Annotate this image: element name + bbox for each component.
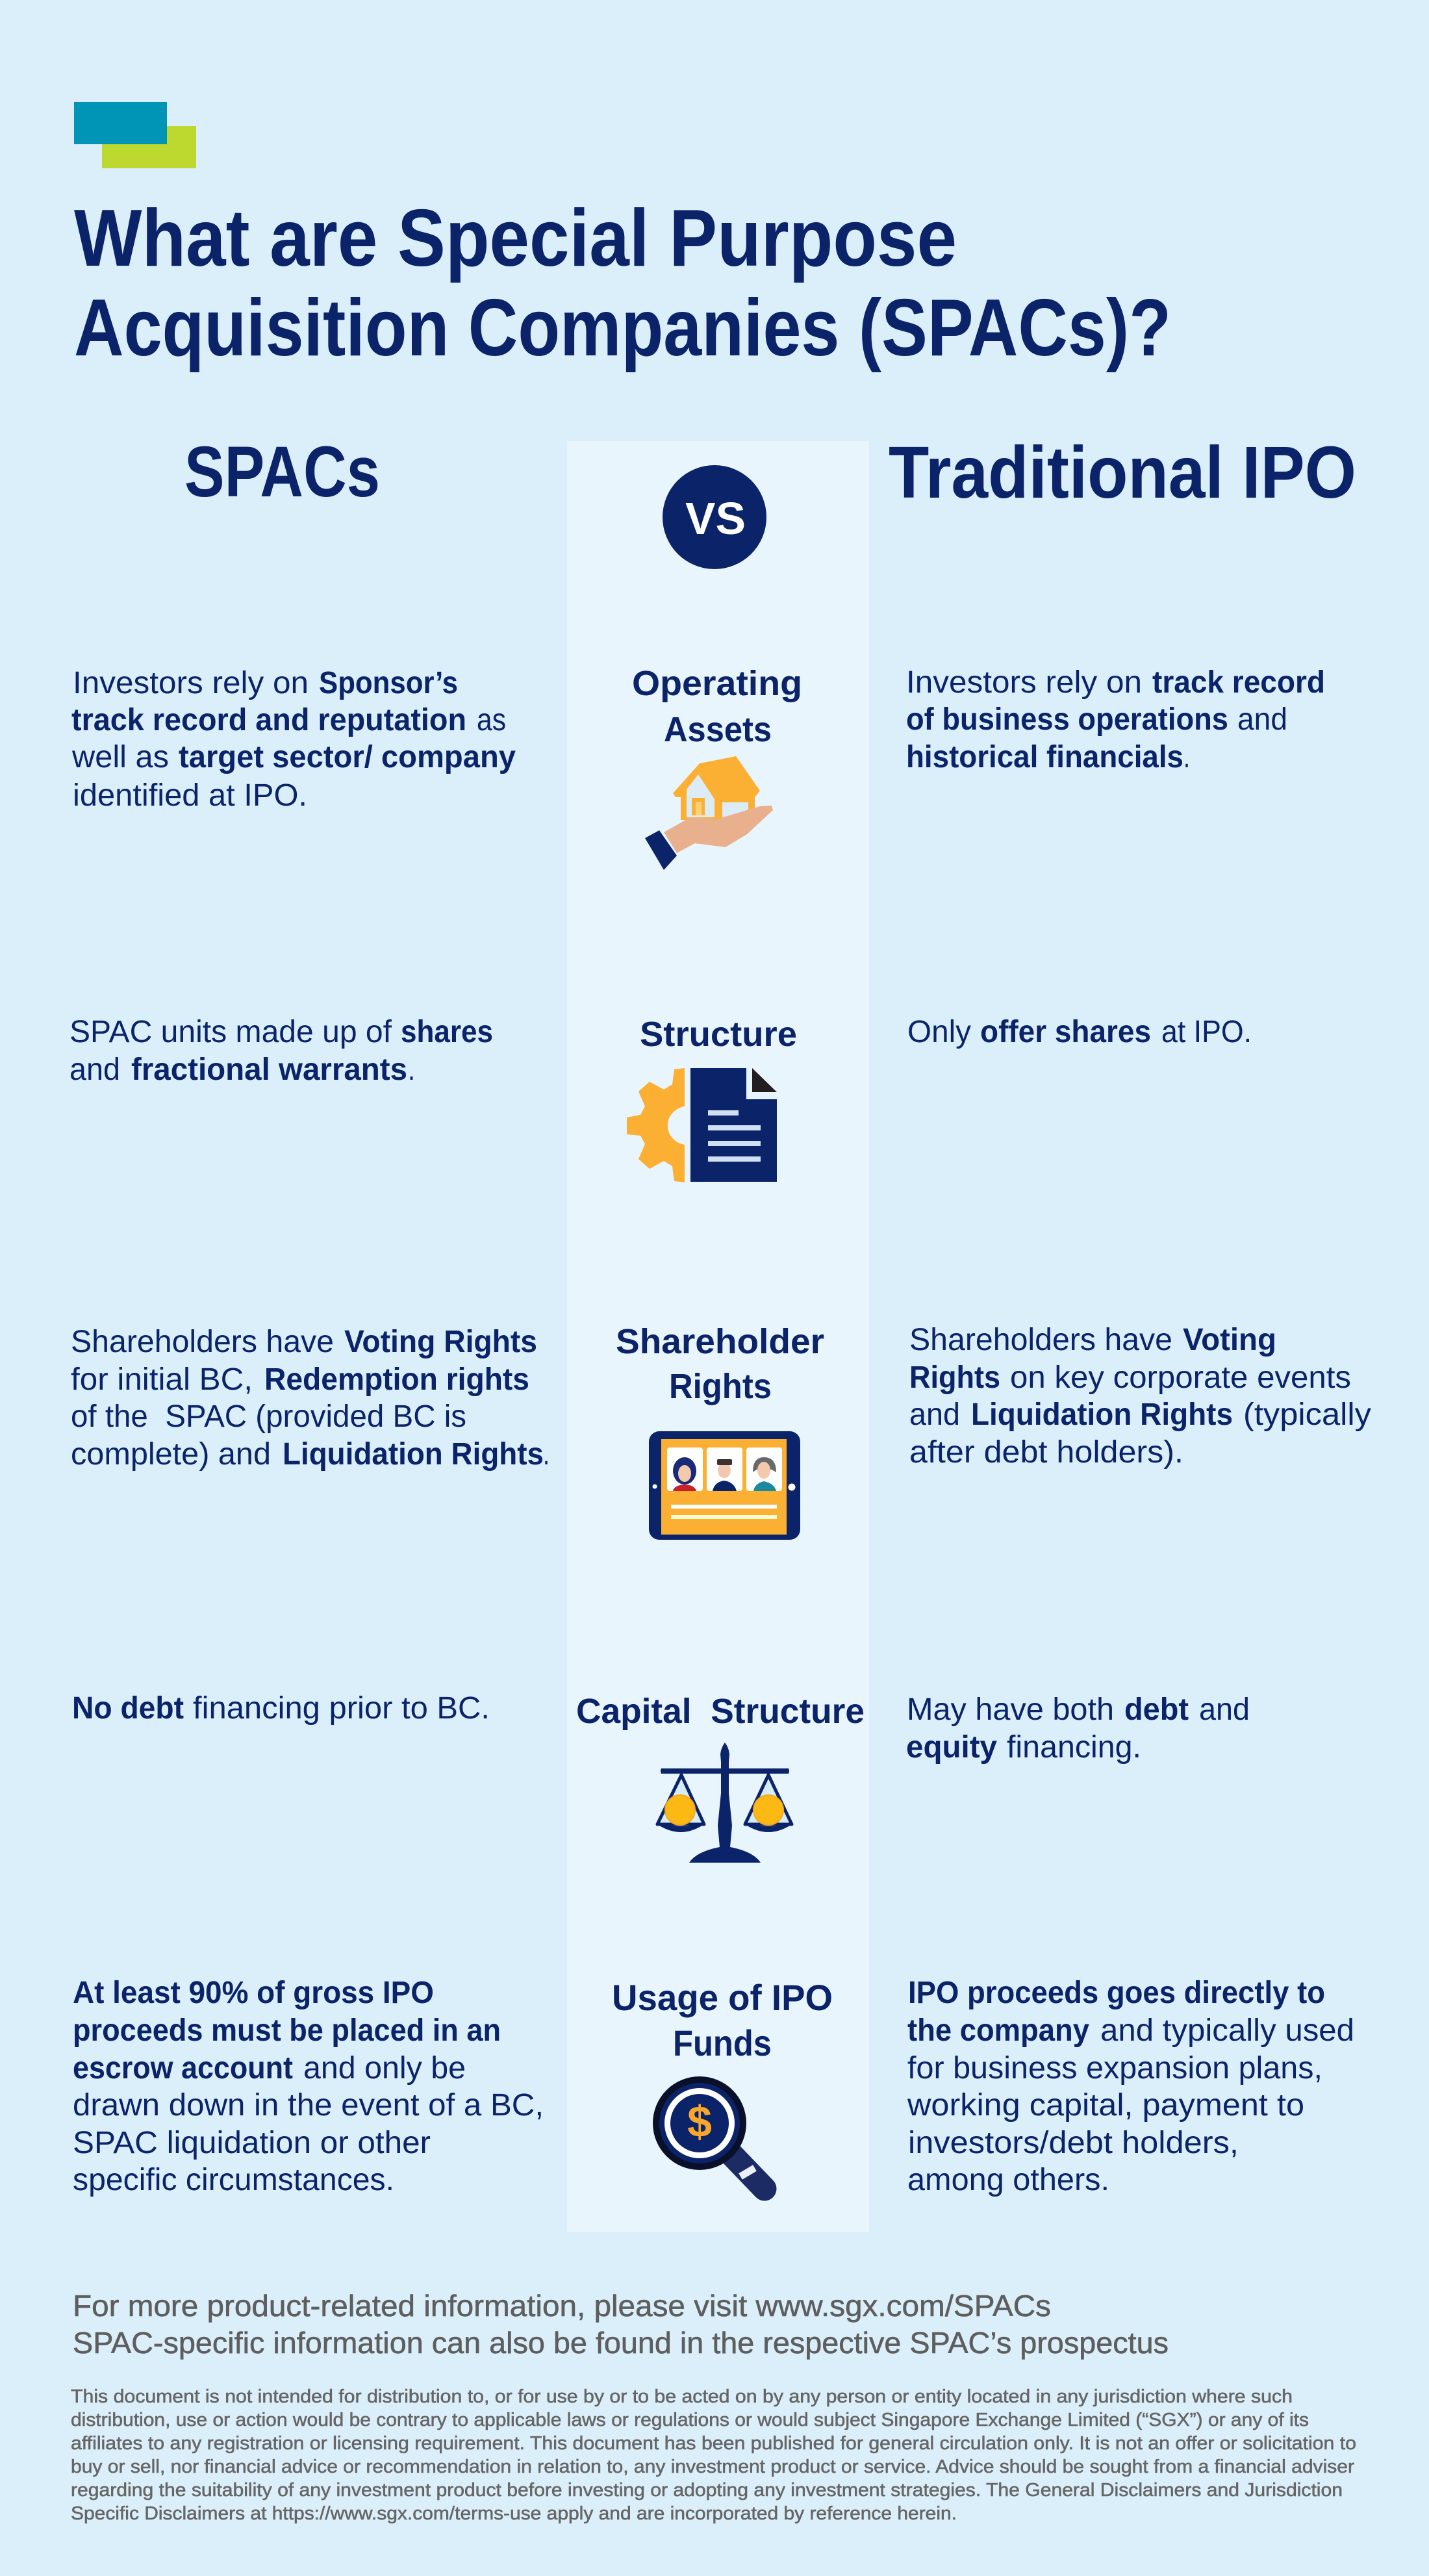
label: Shareholder Rights (616, 1322, 824, 1406)
text: Traditional IPO usage of funds: IPO proceeds goes directly to (908, 1976, 1325, 2010)
icon: vs badge (663, 465, 766, 569)
icon: house on hand (645, 756, 773, 870)
heading: Traditional IPO: Traditional IPO (889, 431, 1356, 513)
text: Traditional IPO shareholder rights (909, 1323, 1371, 1470)
text: Traditional IPO operating assets: track record (1152, 665, 1325, 700)
text: SPACs operating assets: Sponsor’s (319, 666, 458, 700)
text: disclaimer: This document is not intended for distribution to, or for use by or to be acted on by any person or entity located in any jurisdiction where such (71, 2386, 1293, 2407)
text: Traditional IPO structure: offer shares (980, 1015, 1151, 1049)
text: Traditional IPO shareholder rights: and (909, 1397, 960, 1432)
text: SPACs usage of IPO funds: escrow account (73, 2051, 293, 2085)
label: Capital Structure: Capital Structure (576, 1692, 865, 1731)
text: further information: SPAC-specific information can also be found in the respective SPAC’s prospectus (73, 2326, 1169, 2360)
text: SPACs shareholder rights: complete) and (71, 1437, 271, 1472)
text: Traditional IPO usage of funds: the company (907, 2013, 1089, 2048)
text: SPACs operating assets: Investors rely on (73, 666, 309, 700)
text: disclaimer: buy or sell, nor financial advice or recommendation in relation to, any investment product or service. Advice should be sought from a financial adviser (71, 2456, 1354, 2477)
label: Operating Assets: Assets (664, 710, 772, 749)
text: disclaimer: distribution, use or action would be contrary to applicable laws or regulations or would subject Singapore Exchange Limited (“SGX”) or any of its (71, 2410, 1309, 2430)
icon: tablet with three people (649, 1431, 800, 1540)
text: SPACs usage of IPO funds: At least 90% of gross IPO (73, 1976, 434, 2010)
title (74, 194, 1171, 373)
logo mark (74, 102, 196, 168)
icon: vs badge: VS (685, 493, 746, 544)
label: Structure: Structure (640, 1015, 797, 1054)
icon: gear and document (627, 1068, 777, 1182)
text: Traditional IPO structure: Only (907, 1015, 971, 1049)
text: SPACs shareholder rights: . (543, 1437, 550, 1472)
text: Traditional IPO usage of funds: and typically used (1100, 2013, 1354, 2048)
text: Traditional IPO shareholder rights: Rights (909, 1360, 1000, 1395)
text: Traditional IPO shareholder rights: after debt holders). (909, 1435, 1183, 1470)
text: Traditional IPO usage of funds: for business expansion plans, (907, 2051, 1322, 2085)
text: SPACs usage of IPO funds: specific circumstances. (73, 2163, 394, 2197)
text: SPACs capital structure: financing prior to BC. (193, 1691, 490, 1726)
text: further information (73, 2289, 1169, 2360)
text: Traditional IPO operating assets (906, 665, 1325, 774)
label: Usage of IPO Funds: Funds (673, 2022, 772, 2063)
text: SPACs structure (70, 1015, 493, 1087)
text: Traditional IPO operating assets: Investors rely on (906, 665, 1142, 700)
text: Traditional IPO usage of funds: investors/debt holders, (908, 2126, 1239, 2160)
text: disclaimer: Specific Disclaimers at https://www.sgx.com/terms-use apply and are incorporated by reference herein. (71, 2503, 957, 2524)
text: SPACs usage of IPO funds: and only be (303, 2051, 466, 2085)
icon: magnifying glass with dollar: $ (687, 2097, 712, 2147)
panel: centre comparison column (567, 441, 869, 2232)
text: SPACs structure: . (408, 1052, 415, 1087)
text: SPACs operating assets: target sector/ company (179, 740, 516, 774)
text: Traditional IPO usage of funds: among others. (907, 2163, 1109, 2197)
text: SPACs capital structure (72, 1691, 490, 1726)
icon: magnifying glass with dollar (653, 2076, 765, 2189)
text: Traditional IPO operating assets: of business operations (906, 702, 1228, 737)
text: disclaimer: affiliates to any registration or licensing requirement. This document has been published for general circulation only. It is not an offer or solicitation to (71, 2433, 1356, 2454)
text: SPACs usage of IPO funds: SPAC liquidation or other (73, 2126, 431, 2160)
label: Usage of IPO Funds (612, 1977, 833, 2063)
text: SPACs operating assets: track record and reputation (71, 703, 466, 737)
text: SPACs operating assets: identified at IPO. (73, 778, 307, 813)
text: Traditional IPO usage of funds (907, 1976, 1354, 2197)
text: Traditional IPO capital structure: equity (906, 1730, 997, 1765)
icon: balance scale with coins (657, 1742, 792, 1863)
text: Traditional IPO operating assets: and (1237, 702, 1287, 737)
text: SPACs usage of IPO funds: drawn down in the event of a BC, (73, 2088, 544, 2123)
text: Traditional IPO capital structure: financing. (1007, 1730, 1141, 1765)
text: Traditional IPO structure: at IPO. (1161, 1015, 1252, 1049)
text: SPACs operating assets: as (477, 703, 506, 737)
text: Traditional IPO capital structure (906, 1692, 1250, 1765)
text: Traditional IPO capital structure: debt (1124, 1692, 1189, 1727)
text: SPACs structure: fractional warrants (131, 1052, 407, 1087)
heading: SPACs: SPACs (184, 432, 380, 512)
label: Shareholder Rights: Shareholder (616, 1322, 824, 1361)
text: SPACs shareholder rights: Shareholders have (71, 1325, 334, 1359)
text: SPACs shareholder rights: Liquidation Rights (283, 1437, 544, 1472)
text: further information: For more product-related information, please visit www.sgx.com/SPACs (73, 2289, 1051, 2323)
text: SPACs operating assets: well as (71, 740, 169, 774)
text: Traditional IPO operating assets: historical financials (906, 740, 1183, 774)
text: SPACs operating assets (71, 666, 516, 813)
title: What are Special Purpose (74, 194, 957, 283)
text: SPACs shareholder rights: for initial BC, (71, 1362, 253, 1397)
text: SPACs shareholder rights: Redemption rights (264, 1362, 529, 1397)
title: Acquisition Companies (SPACs)? (74, 283, 1171, 373)
text: Traditional IPO operating assets: . (1183, 740, 1190, 774)
text: SPACs shareholder rights: of the SPAC (provided BC is (71, 1399, 466, 1434)
text: SPACs usage of IPO funds (73, 1976, 544, 2197)
text: SPACs structure: SPAC units made up of (70, 1015, 392, 1049)
text: SPACs capital structure: No debt (72, 1691, 184, 1726)
text: Traditional IPO capital structure: and (1199, 1692, 1250, 1727)
text: SPACs shareholder rights (71, 1325, 550, 1472)
label: Operating Assets (632, 664, 802, 749)
text: Traditional IPO shareholder rights: Shareholders have (909, 1323, 1172, 1357)
text: Traditional IPO capital structure: May have both (907, 1692, 1114, 1727)
label: Shareholder Rights: Rights (669, 1367, 772, 1406)
text: disclaimer (71, 2386, 1356, 2524)
text: Traditional IPO shareholder rights: Liquidation Rights (971, 1397, 1233, 1432)
text: SPACs shareholder rights: Voting Rights (344, 1325, 537, 1359)
text: Traditional IPO shareholder rights: (typically (1243, 1397, 1371, 1432)
text: SPACs structure: and (70, 1052, 120, 1087)
text: Traditional IPO usage of funds: working capital, payment to (907, 2088, 1304, 2123)
text: SPACs usage of IPO funds: proceeds must be placed in an (73, 2013, 501, 2048)
label: Usage of IPO Funds: Usage of IPO (612, 1977, 833, 2018)
text: SPACs structure: shares (401, 1015, 493, 1049)
text: Traditional IPO structure (907, 1015, 1252, 1049)
label: Operating Assets: Operating (632, 664, 802, 703)
text: disclaimer: regarding the suitability of any investment product before investing or adopting any investment strategies. The General Disclaimers and Jurisdiction (71, 2480, 1343, 2501)
text: Traditional IPO shareholder rights: on key corporate events (1010, 1360, 1351, 1395)
text: Traditional IPO shareholder rights: Voting (1183, 1323, 1276, 1357)
